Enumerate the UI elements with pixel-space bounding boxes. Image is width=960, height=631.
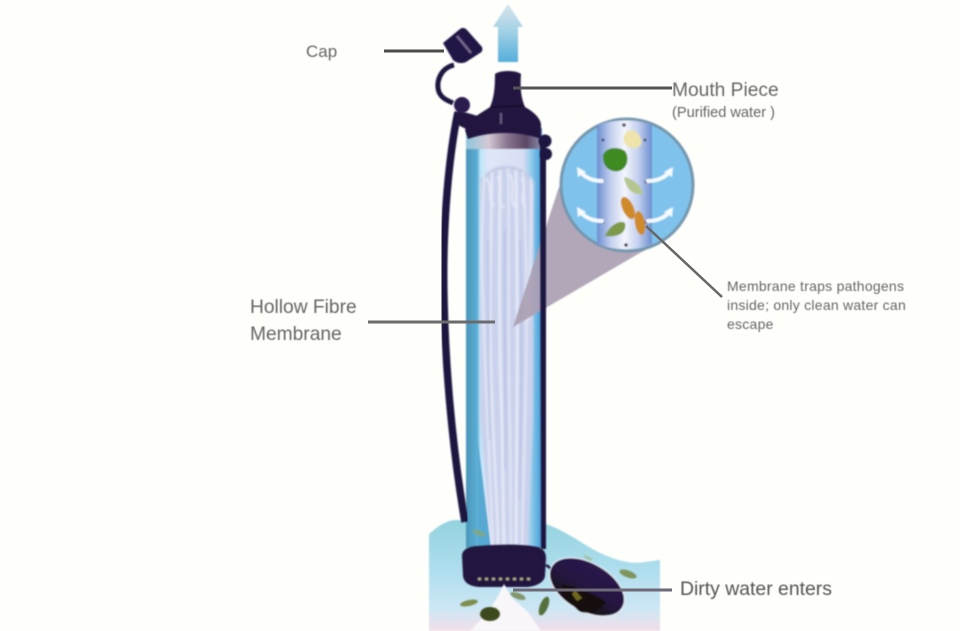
leader line: hollow fibre membrane (368, 320, 495, 324)
leader line: mouth piece (513, 86, 672, 90)
mouth piece and top housing (456, 71, 552, 160)
right upper arrow (648, 171, 670, 181)
label: hollow fibre membrane (250, 297, 357, 345)
pores (602, 123, 647, 247)
pale pathogen (624, 130, 642, 148)
label: mouth piece: (Purified water ) (672, 105, 775, 121)
incoming dirty water splash (470, 584, 541, 631)
hollow fibre membrane strands (480, 167, 534, 548)
callout: membrane explanation: Membrane traps pathogens (727, 278, 904, 294)
green leaf pathogen (605, 222, 625, 236)
side clips (538, 134, 552, 148)
long strap tube (444, 112, 465, 522)
filter base and intake (462, 545, 556, 587)
strap to lid (546, 565, 556, 572)
callout: membrane explanation: inside; only clean water can (727, 297, 906, 313)
green pathogen (603, 148, 627, 171)
left lower arrow (580, 211, 602, 221)
callout: membrane explanation: escape (727, 316, 774, 332)
strap joint (456, 110, 478, 130)
magnifier circle (561, 119, 693, 251)
water body (429, 520, 660, 631)
cap with tether (438, 28, 482, 113)
right lower arrow (648, 211, 670, 221)
label: dirty water enters: Dirty water enters (680, 578, 832, 600)
leader line: cap (384, 50, 444, 52)
upward flow arrow (493, 4, 523, 62)
left upper arrow (580, 171, 602, 181)
left band widening at the base (478, 440, 491, 548)
filter tube body (466, 128, 542, 548)
label: mouth piece (672, 80, 779, 121)
callout: membrane explanation (727, 278, 906, 332)
magnifier cone (513, 187, 645, 327)
intake holes (478, 578, 533, 580)
highlights (500, 113, 502, 124)
label: cap: Cap (306, 42, 337, 61)
tube right wall (540, 140, 546, 549)
collar shading (466, 128, 541, 149)
membrane column (597, 120, 652, 249)
leader line: dirty water (513, 588, 672, 592)
orange pathogens (618, 195, 638, 221)
arrow heads (577, 167, 673, 217)
label: hollow fibre membrane: Membrane (250, 324, 342, 345)
pale green pathogen (624, 177, 643, 194)
label: hollow fibre membrane: Hollow Fibre (250, 297, 357, 318)
leader line: membrane callout (646, 226, 722, 297)
base lid (539, 546, 635, 628)
label: mouth piece: Mouth Piece (672, 80, 779, 101)
debris leaves (460, 528, 638, 621)
